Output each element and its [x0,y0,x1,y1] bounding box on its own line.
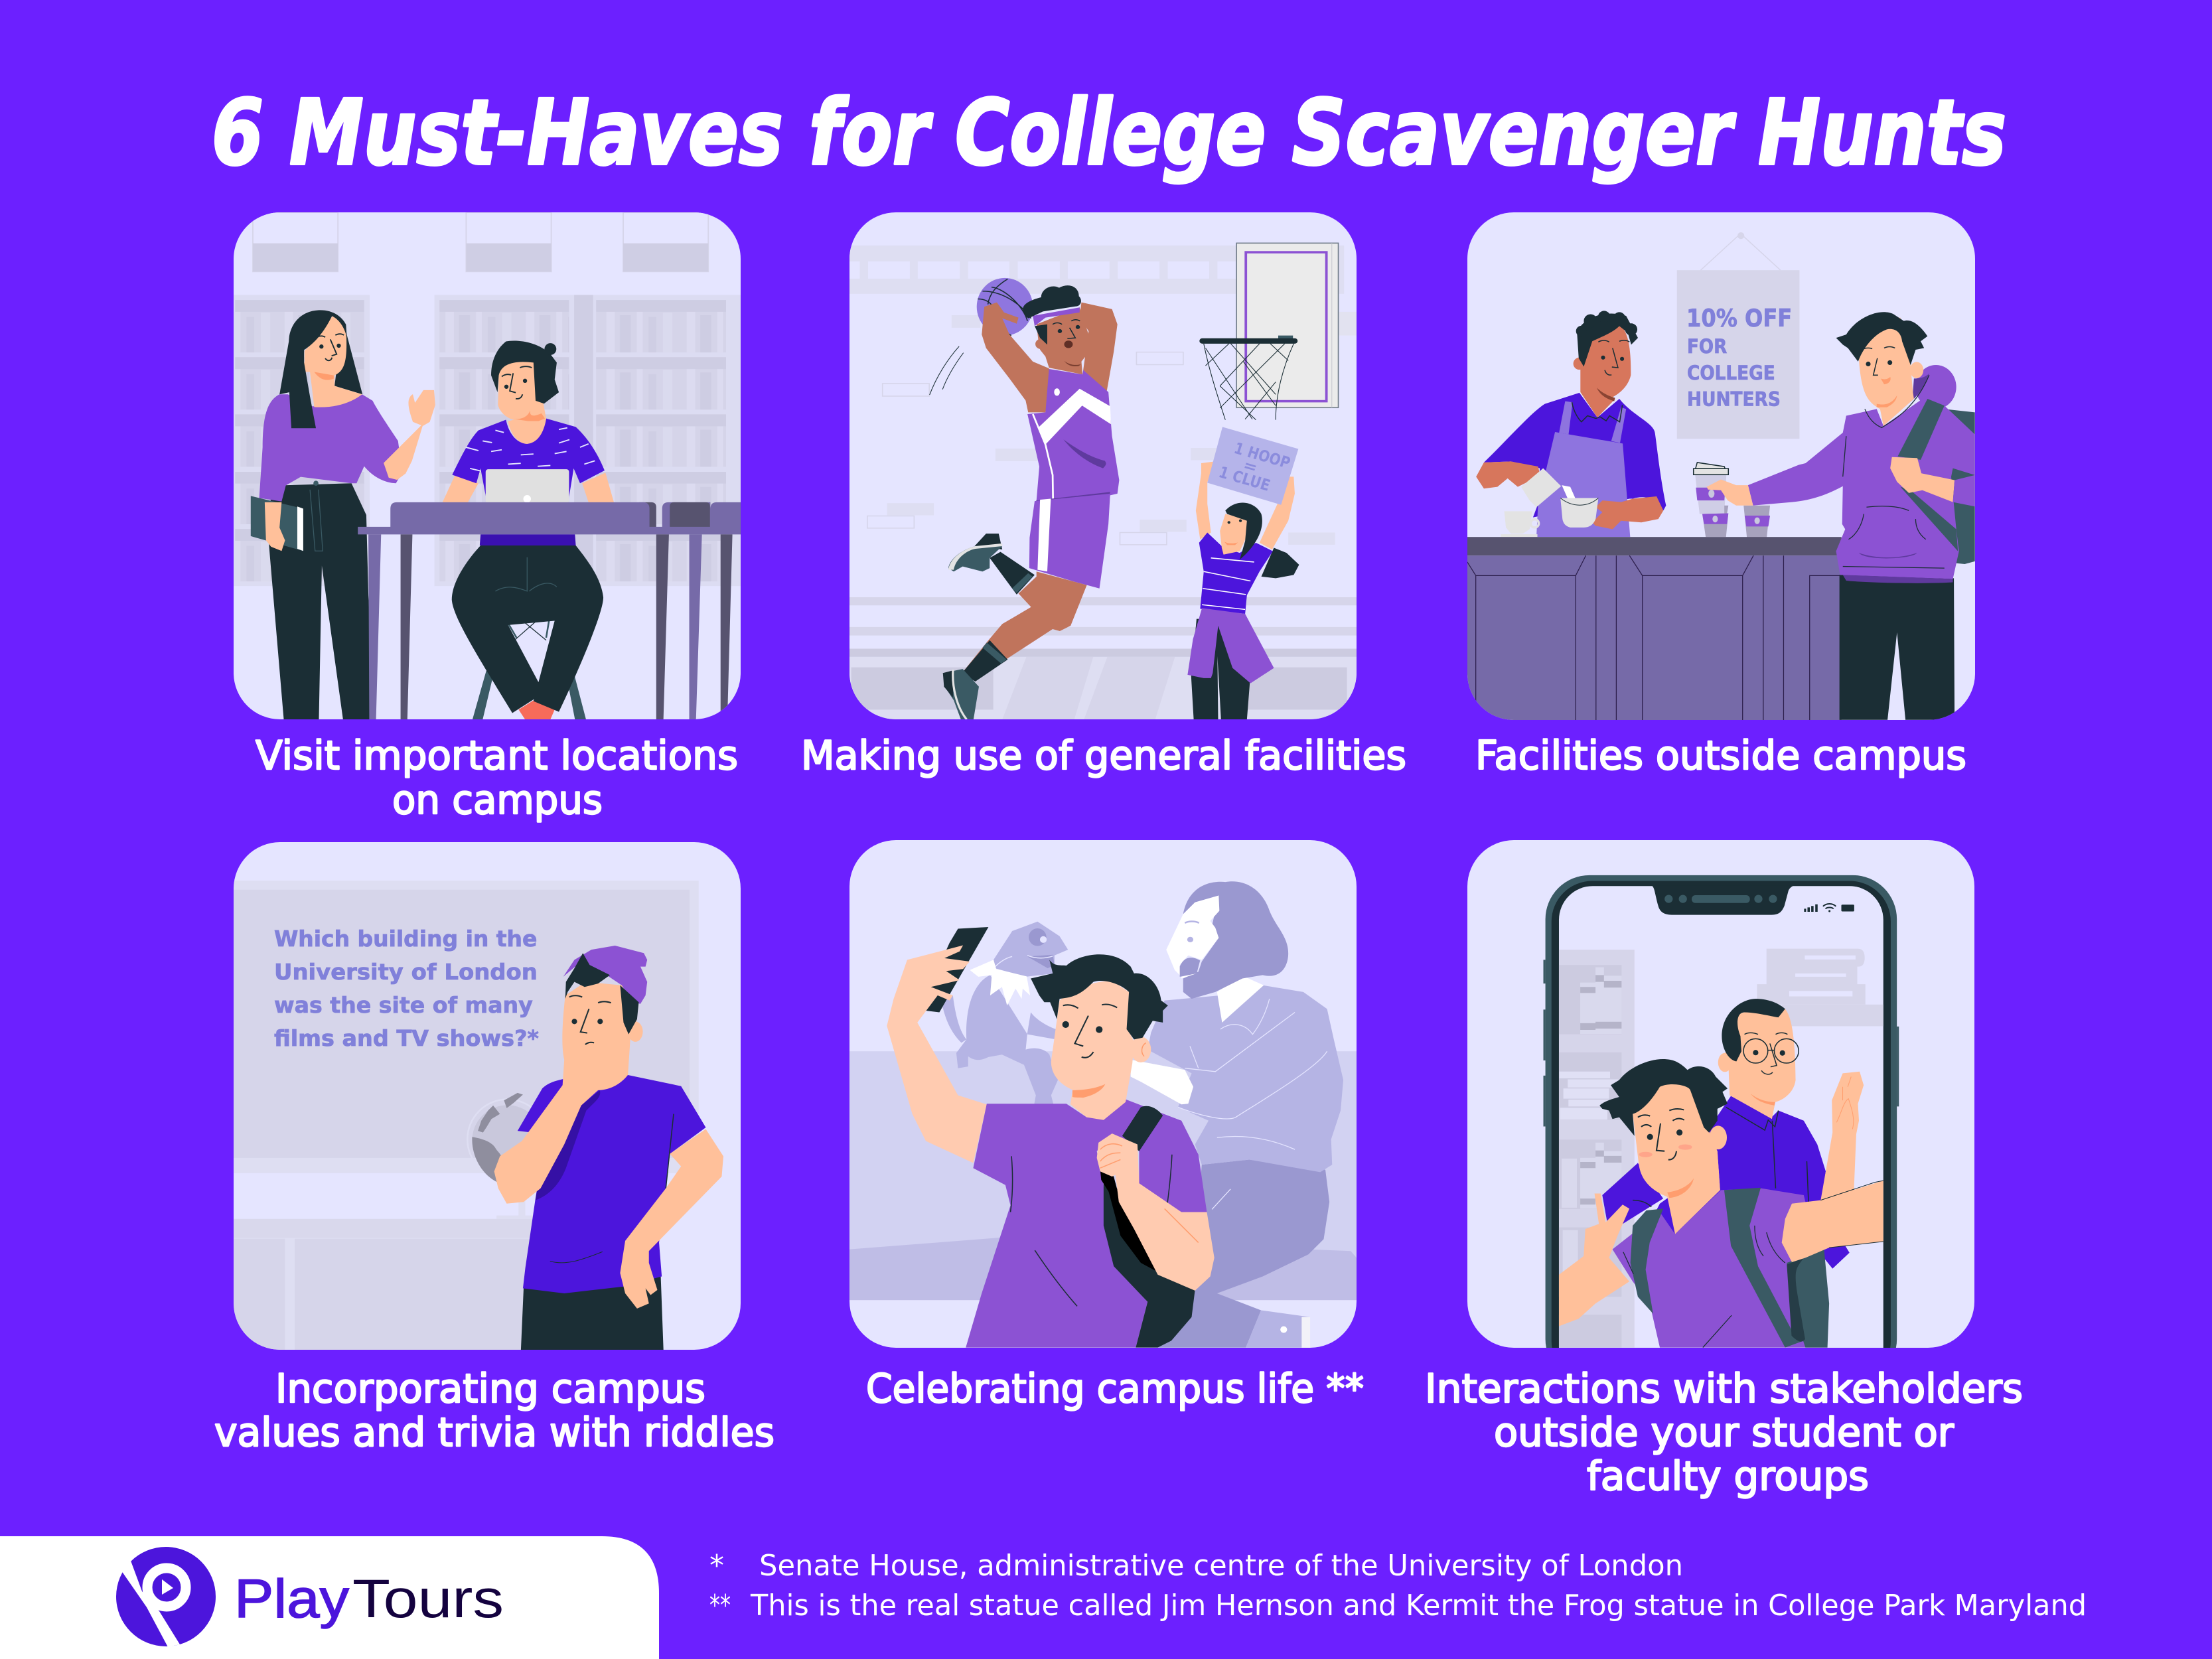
poster: 10% off: 10% OFF [1686,304,1792,332]
riddle text on board: was the site of many [274,993,533,1018]
cheering girl [1187,427,1299,719]
poster: 10% off: HUNTERS [1687,388,1781,411]
selfie student [887,927,1215,1348]
footnotes: ** [709,1589,731,1623]
caption: panel 4: values and trivia with riddles [214,1409,774,1456]
basketball [977,278,1033,336]
backboard and hoop [1199,243,1339,420]
logo wordmark: Play [234,1569,349,1629]
illustration: phone selfie [1544,875,1899,1383]
older man with glasses [1602,999,1864,1269]
coffee cups [1694,463,1770,539]
table [358,502,741,719]
caption: panel 4: Incorporating campus [275,1366,705,1412]
sign: 1 hoop = 1 clue [1207,427,1298,505]
panel: riddles and trivia [234,842,741,1352]
logo: PlayTours: Tours [352,1569,504,1629]
gym background [849,246,1357,721]
counter [1467,537,1842,721]
panel: making use of general facilities [849,212,1357,721]
seated man [443,340,614,503]
motion lines [930,346,964,395]
logo: PlayTours [114,1547,504,1647]
beanie [563,946,647,1004]
background bookshelves [1559,949,1883,1348]
poster: 10% off [1677,232,1799,439]
thinking man [494,946,723,1350]
Kermit statue [941,922,1068,1104]
caption: panel 6: Interactions with stakeholders [1425,1366,2023,1412]
caption: panel 5: Celebrating campus life ** [866,1366,1364,1412]
riddle text on board: Which building in the [274,926,537,952]
poster: 10% off: COLLEGE [1687,362,1775,384]
sign: 1 hoop = 1 clue: 1 HOOP [1232,439,1292,472]
footer logo panel [0,1536,659,1659]
panel: interactions with stakeholders [1467,840,1974,1383]
caption: panel 1: on campus [392,777,603,824]
library shelves [234,212,741,586]
caption: panel 2: Making use of general facilities [801,733,1406,779]
footnotes: * [709,1549,724,1583]
standing woman [251,310,435,719]
customer with hoodie [1707,312,1975,720]
sign: 1 hoop = 1 clue: 1 CLUE [1217,463,1272,495]
phone frame [1544,875,1899,1383]
panel: facilities outside campus [1467,212,1975,721]
caption: panel 3: Facilities outside campus [1475,733,1966,779]
riddle text on board [274,926,539,1051]
logo mark [114,1547,216,1647]
illustration: thinking student [234,881,723,1352]
riddle text on board: University of London [274,960,538,985]
footnotes: This is the real statue called Jim Hernson and Kermit the Frog statue in College Park Maryland [750,1589,2087,1623]
bench [849,1051,1357,1300]
young man with backpack [1559,1059,1883,1348]
poster: 10% off: FOR [1687,335,1727,358]
jumping player [943,285,1119,719]
illustration: library scene [234,212,741,719]
riddle text on board: films and TV shows?* [274,1026,539,1051]
illustration: cafe scene [1467,232,1975,721]
caption: panel 6 [1425,1366,2023,1500]
footnotes [709,1549,2087,1623]
caption: panel 6: outside your student or [1494,1409,1954,1456]
footnotes: Senate House, administrative centre of the University of London [759,1549,1683,1583]
panel: celebrating campus life [849,840,1357,1349]
illustration: basketball scene [849,243,1357,721]
man's legs [452,545,603,719]
caption: panel 1 [256,733,738,824]
panel: visit important locations [234,212,741,719]
caption: panel 6: faculty groups [1587,1453,1869,1500]
caption: panel 1: Visit important locations [256,733,738,779]
Jim Henson statue [1131,881,1343,1349]
barista [1476,311,1666,537]
classroom board [234,881,699,1352]
illustration: selfie with statues [849,881,1357,1349]
seated man's chair [473,621,586,719]
sign: 1 hoop = 1 clue: = [1241,456,1260,477]
caption: panel 4 [214,1366,774,1456]
globe [467,1093,548,1219]
